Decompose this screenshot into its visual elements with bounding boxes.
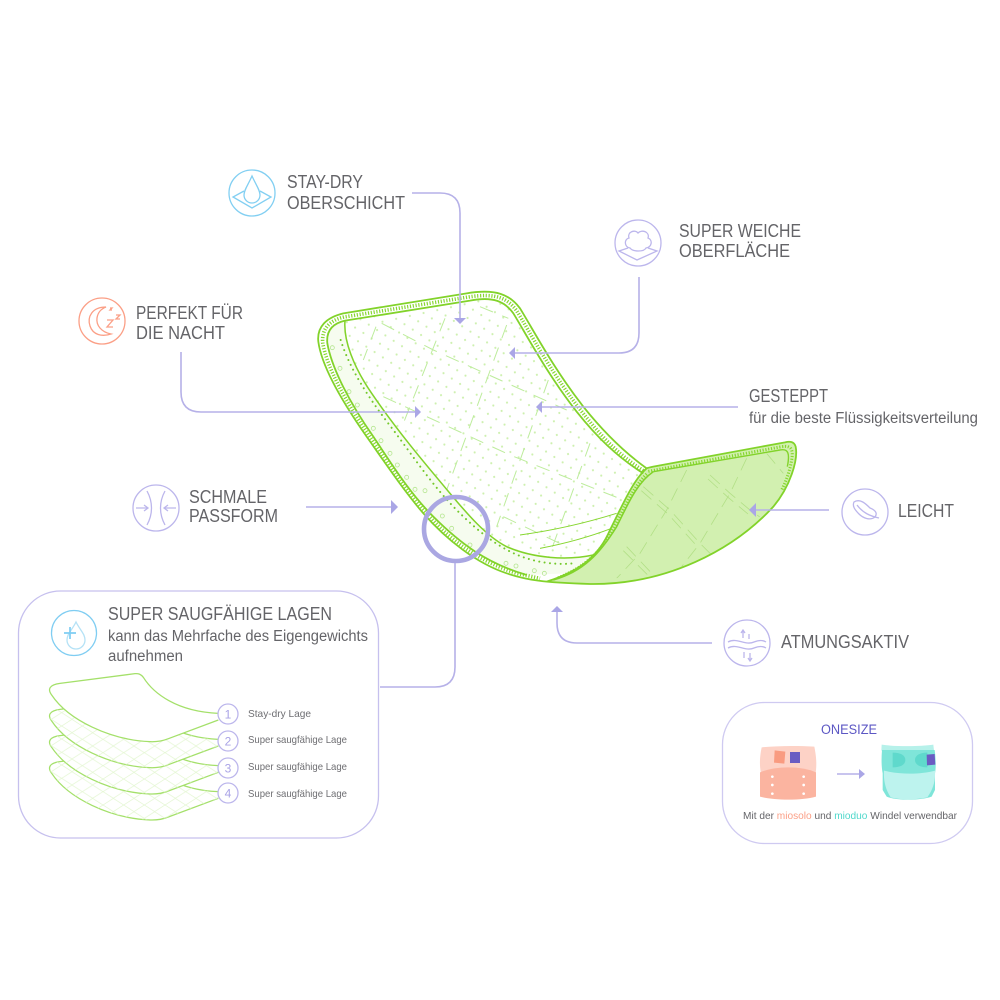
icon: water drop on sheet: [229, 170, 275, 216]
layer numbers: 4: [225, 786, 232, 800]
caption: Mit der miosolo und mioduo Windel verwendbar: [743, 810, 957, 822]
icon: airflow through layers: [724, 620, 770, 666]
arrow: [837, 769, 865, 779]
flap rim hatching: [648, 446, 792, 490]
layer 4: [50, 752, 218, 820]
heading: LEICHT: [898, 501, 954, 521]
feature: quilted: [749, 386, 978, 427]
icon: soft cloud on sheet: [615, 220, 661, 266]
band dotted line: [341, 340, 573, 564]
panel: onesize: [722, 702, 972, 844]
feature: light: [842, 489, 954, 535]
heading: [136, 303, 243, 343]
layer labels: Super saugfähige Lage: [248, 788, 347, 800]
connector: stay-dry arrow: [412, 193, 466, 324]
layer 1: [50, 674, 218, 742]
connector: gesteppt arrow: [536, 401, 738, 413]
layer labels: Stay-dry Lage: [248, 708, 311, 720]
zoom circle: [424, 497, 488, 561]
icon: feather: [842, 489, 888, 535]
heading: OBERFLÄCHE: [679, 241, 790, 261]
layer numbers: 2: [225, 734, 232, 748]
heading: [679, 221, 801, 261]
icon: moon and zzz: [79, 298, 125, 344]
fabric folds: [520, 513, 617, 548]
heading: PASSFORM: [189, 506, 278, 526]
icon: orange diaper: [760, 746, 816, 800]
flap quilting: [617, 453, 783, 578]
feature: breathable: [724, 620, 909, 666]
panel heading: aufnehmen: [108, 648, 183, 665]
layer 2: [50, 700, 218, 768]
icon: drop with plus: [52, 610, 96, 656]
connector: passform arrow: [306, 500, 398, 514]
heading: STAY-DRY: [287, 172, 363, 192]
connector: zoom circle to layers panel: [380, 563, 455, 687]
heading: ATMUNGSAKTIV: [781, 632, 909, 652]
rim hatching: [323, 296, 643, 578]
layer labels: Super saugfähige Lage: [248, 734, 347, 746]
band circles: [330, 346, 546, 575]
heading: OBERSCHICHT: [287, 193, 405, 213]
heading: [189, 487, 278, 526]
feature: night: [79, 298, 243, 344]
icon: teal diaper: [881, 745, 936, 800]
feature: super soft: [615, 220, 801, 266]
feature: stay-dry: [229, 170, 405, 216]
panel: absorbent layers: [18, 591, 378, 838]
layer labels: [248, 708, 347, 800]
back flap: [547, 442, 796, 584]
flap fold-edge hatching: [557, 474, 647, 578]
icon: inward arrows: [133, 485, 179, 531]
heading: SCHMALE: [189, 487, 267, 507]
layer labels: Super saugfähige Lage: [248, 761, 347, 773]
connector: atmungsaktiv arrow: [551, 606, 712, 643]
layers stack: [50, 674, 218, 820]
layer 3: [50, 726, 218, 794]
panel heading: kann das Mehrfache des Eigengewichts: [108, 628, 368, 645]
connector: leicht arrow: [749, 503, 829, 517]
heading: SUPER WEICHE: [679, 221, 801, 241]
layer number badges: [218, 704, 238, 803]
feature: slim fit: [133, 485, 278, 531]
layer numbers: 1: [225, 708, 232, 722]
connector: super soft arrow: [509, 277, 639, 359]
heading: PERFEKT FÜR: [136, 303, 243, 323]
pad outlines: [318, 292, 796, 584]
panel heading: [108, 604, 368, 665]
feature: quilted: für die beste Flüssigkeitsverteilung: [749, 410, 978, 427]
onesize heading: ONESIZE: [821, 722, 877, 737]
pad body fill: [318, 292, 647, 582]
feature: quilted: GESTEPPT: [749, 386, 828, 406]
panel heading: SUPER SAUGFÄHIGE LAGEN: [108, 604, 332, 624]
absorbent side band: [327, 321, 593, 575]
connector: night arrow: [181, 352, 421, 418]
top sheet dots and quilting: [346, 300, 638, 557]
heading: DIE NACHT: [136, 323, 225, 343]
layer numbers: 3: [225, 762, 232, 776]
pad illustration: [318, 290, 796, 584]
layer numbers: [225, 708, 232, 800]
heading: [287, 172, 405, 213]
